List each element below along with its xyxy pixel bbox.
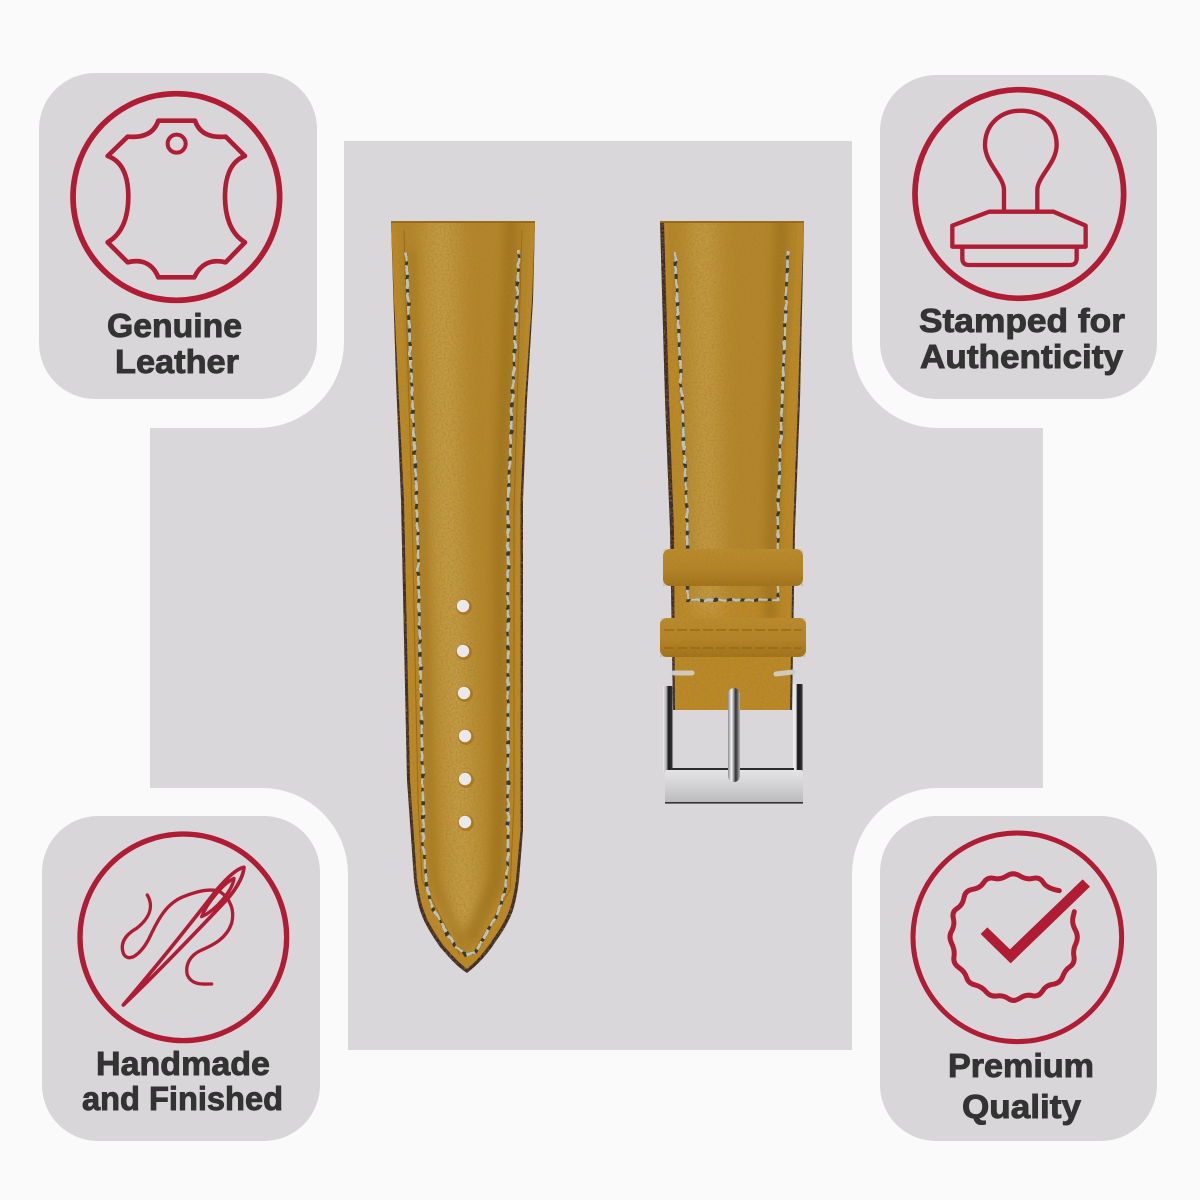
label: genuine leather: Leather [115, 343, 239, 380]
keeper: upper [663, 549, 803, 586]
stitching: left strap [406, 250, 519, 955]
card: genuine leather [39, 73, 317, 399]
label: handmade and finished: Handmade [96, 1045, 270, 1082]
watch strap: long piece [391, 221, 535, 973]
label: premium quality: Premium [948, 1047, 1094, 1084]
icon: check badge [913, 833, 1122, 1042]
label: handmade and finished: and Finished [82, 1080, 283, 1117]
buckle plate [665, 768, 803, 804]
watch strap: buckle piece [655, 200, 810, 804]
label: premium quality [948, 1047, 1094, 1125]
shading of padded area [668, 221, 798, 602]
buckle side bars [663, 684, 803, 772]
label: stamped for authenticity: Stamped for [919, 302, 1125, 339]
thread ends [674, 672, 793, 674]
card: handmade and finished [42, 816, 320, 1141]
label: premium quality: Quality [962, 1088, 1082, 1125]
label: stamped for authenticity: Authenticity [920, 338, 1124, 375]
stitching: right strap [675, 250, 788, 600]
label: genuine leather [107, 307, 242, 380]
card: stamped for authenticity [880, 75, 1157, 399]
icon: rubber stamp [915, 90, 1124, 298]
icon: needle and thread [80, 834, 287, 1041]
label: genuine leather: Genuine [107, 307, 242, 344]
icon: leather hide [73, 94, 280, 300]
keeper: lower [660, 618, 806, 657]
shading of padded area [396, 221, 530, 960]
label: handmade and finished [82, 1045, 283, 1117]
card: premium quality [880, 816, 1157, 1141]
strap holes [456, 599, 474, 831]
buckle pin [728, 688, 740, 782]
label: stamped for authenticity [919, 302, 1125, 375]
